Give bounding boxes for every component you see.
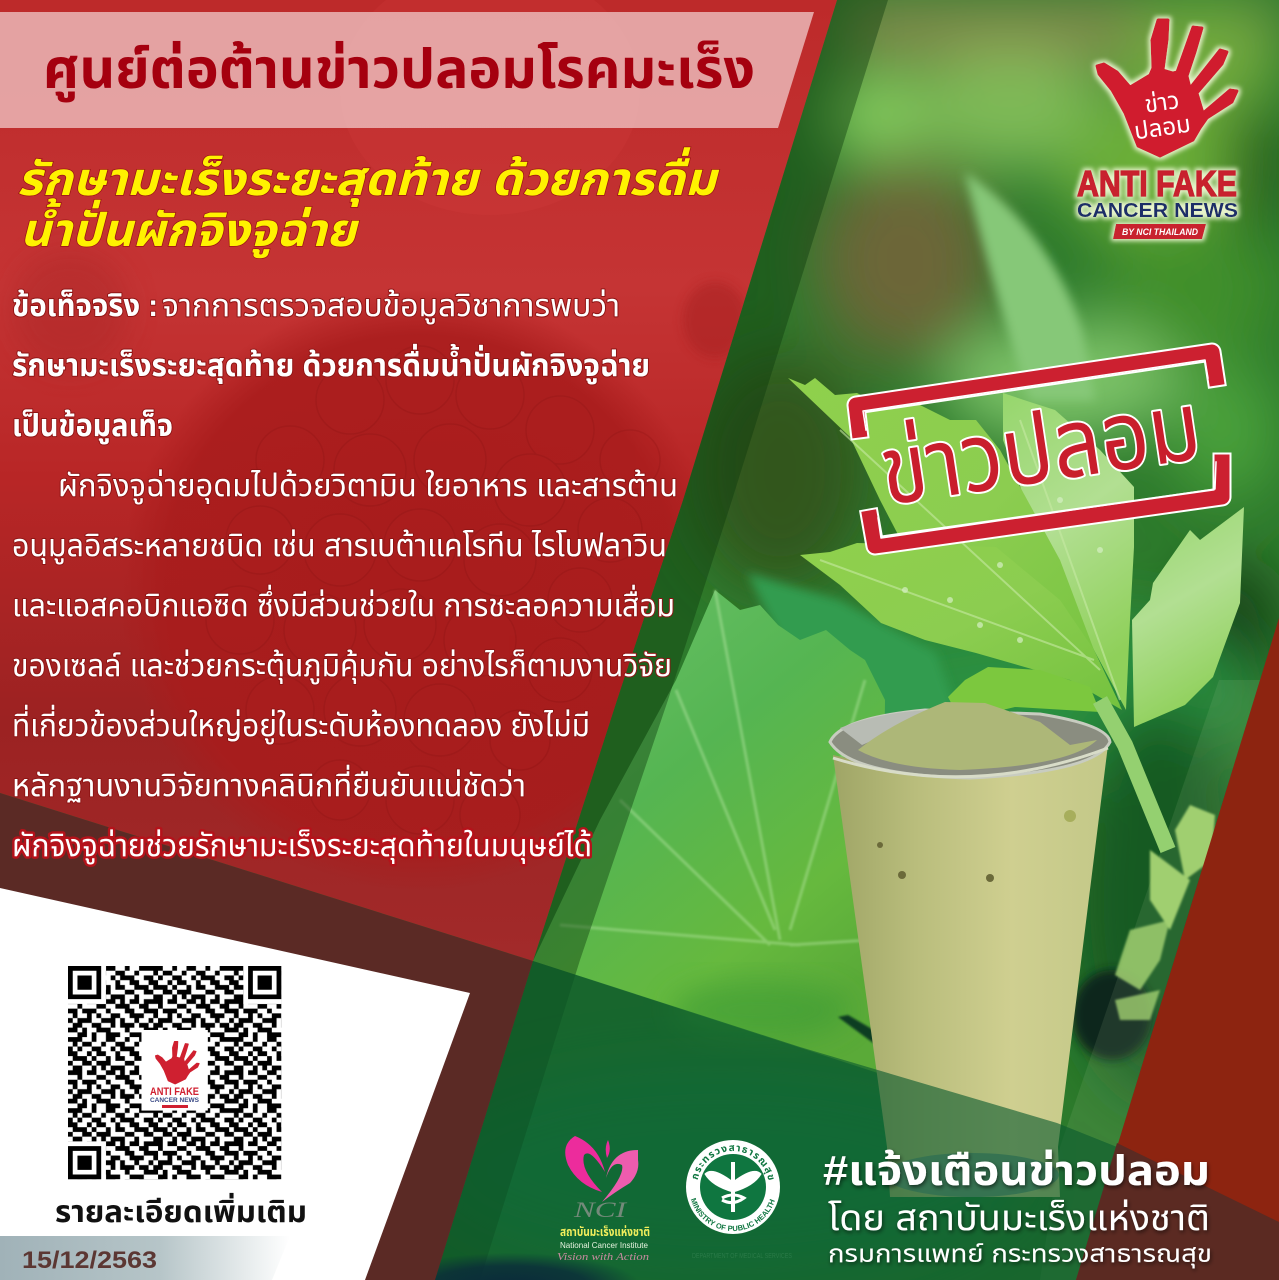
leaf: large left leaf (533, 590, 885, 1075)
hashtag credit block: กรมการแพทย์ กระทรวงสาธารณสุข (828, 1240, 1212, 1269)
right brown panel (1076, 1143, 1279, 1280)
logo wordmark: CANCER NEWS (1077, 200, 1238, 222)
body text: ผักจิงจูฉ่ายอุดมไปด้วยวิตามิน ใยอาหาร และสารต้าน (58, 468, 678, 504)
leaf: blurred upper leaf (965, 172, 1095, 400)
logo: National Cancer Institute (557, 1136, 650, 1263)
right translucent strip (1040, 680, 1260, 1280)
hand label: ปลอม (1133, 111, 1192, 145)
logo: Ministry of Public Health seal: MINISTRY OF PUBLIC HEALTH (690, 1198, 775, 1232)
fake news stamp (856, 352, 1222, 546)
logo: National Cancer Institute: สถาบันมะเร็งแห่งชาติ (560, 1225, 650, 1239)
logo: National Cancer Institute: National Cancer Institute (560, 1240, 648, 1250)
logo tag text: BY NCI THAILAND (1122, 227, 1198, 238)
leaf: background dark leaf (747, 573, 960, 760)
body text: ข้อเท็จจริง : (12, 288, 158, 323)
QR centre logo: ANTI FAKE (150, 1086, 199, 1098)
logo wordmark: ANTI FAKE (1077, 163, 1237, 204)
logo wordmark (1077, 163, 1238, 239)
icon: red hand (1097, 20, 1237, 156)
yellow headline: น้ำปั่นผักจิงจูฉ่าย (20, 198, 360, 259)
logo: Ministry of Public Health seal: กระทรวงสาธารณสุข (692, 1145, 774, 1180)
logo: National Cancer Institute: Vision with Action (557, 1252, 649, 1263)
brown border panel (0, 793, 533, 1280)
leaf: horizontal left leaf (800, 543, 1122, 710)
leaf speckles (902, 497, 1103, 643)
body text: จากการตรวจสอบข้อมูลวิชาการพบว่า (162, 288, 620, 324)
hand label (1129, 85, 1192, 145)
QR centre logo: CANCER NEWS (150, 1097, 200, 1104)
icon: caduceus (705, 1162, 761, 1212)
hashtag credit block: #แจ้งเตือนข่าวปลอม (823, 1147, 1210, 1194)
dark lower photo overlay (435, 961, 1117, 1280)
yellow headline: รักษามะเร็งระยะสุดท้าย ด้วยการดื่ม (17, 147, 719, 207)
right red panel (1076, 618, 1279, 1280)
title banner (0, 12, 814, 128)
body text (12, 288, 678, 864)
icon: pink crescents (565, 1136, 605, 1192)
plant stem (1100, 700, 1168, 850)
NCI mark: NCI (573, 1197, 628, 1222)
body text: ที่เกี่ยวข้องส่วนใหญ่อยู่ในระดับห้องทดลอง ยังไม่มี (12, 704, 590, 744)
hand label: ข่าว (1143, 86, 1181, 119)
body text: ของเซลล์ และช่วยกระตุ้นภูมิคุ้มกัน อย่างไรก็ตามงานวิจัย (12, 648, 672, 684)
background texture: blood cells (10, 0, 747, 890)
milkshake glass (830, 702, 1110, 1197)
hashtag credit block: โดย สถาบันมะเร็งแห่งชาติ (828, 1197, 1210, 1238)
bottom dark gradient (380, 1245, 640, 1280)
hashtag credit block (823, 1147, 1212, 1269)
body text: หลักฐานงานวิจัยทางคลินิกที่ยืนยันแน่ชัดว่า (12, 764, 526, 803)
leaf: central tall leaf (1003, 393, 1134, 710)
body text: เป็นข้อมูลเท็จ (12, 408, 173, 444)
title banner: ศูนย์ต่อต้านข่าวปลอมโรคมะเร็ง (43, 38, 755, 103)
body text: และแอสคอบิกแอซิด ซึ่งมีส่วนช่วยใน การชะลอความเสื่อม (12, 584, 675, 623)
QR caption: รายละเอียดเพิ่มเติม (55, 1192, 307, 1229)
leaf: small lower leaf (948, 667, 1100, 720)
date bar: 15/12/2563 (22, 1247, 157, 1274)
QR centre logo (150, 1042, 200, 1108)
milkshake specks (877, 842, 994, 882)
body text: ผักจิงจูฉ่ายช่วยรักษามะเร็งระยะสุดท้ายในมนุษย์ได้ (12, 828, 592, 864)
right background detail: dark hollow (1072, 970, 1152, 1060)
plant detail behind strip (1115, 805, 1215, 1020)
QR code (68, 966, 281, 1179)
leaf: upper left leaf (788, 378, 1120, 705)
logo: Anti Fake Cancer News (1077, 20, 1238, 239)
logo: Ministry of Public Health seal (686, 1140, 792, 1260)
body text: รักษามะเร็งระยะสุดท้าย ด้วยการดื่มน้ำปั่นผักจิงจูฉ่าย (12, 343, 650, 384)
translucent diagonal strip (435, 0, 888, 1280)
stamp frame (856, 352, 1222, 546)
left red panel (0, 0, 837, 961)
stamp text: ข่าวปลอม (873, 372, 1208, 526)
date bar (0, 1236, 290, 1280)
yellow headline (17, 147, 719, 259)
white QR panel (0, 888, 470, 1280)
faint department label: DEPARTMENT OF MEDICAL SERVICES (692, 1253, 792, 1260)
body text: อนุมูลอิสระหลายชนิด เช่น สารเบต้าแคโรทีน ไรโบฟลาวิน (12, 528, 667, 564)
leaf: right leaf (1132, 507, 1244, 727)
